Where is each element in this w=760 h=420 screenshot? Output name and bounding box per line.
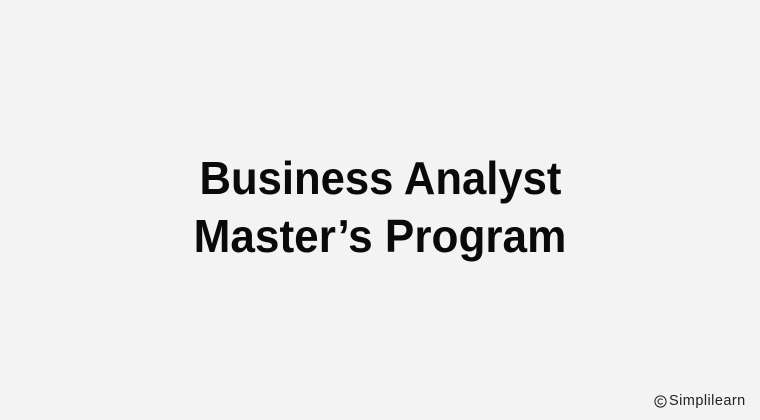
title xyxy=(194,152,566,262)
logo: Simplilearn copyright mark: Simplilearn xyxy=(669,393,746,409)
title: Business Analyst xyxy=(200,152,561,204)
title: Master’s Program xyxy=(194,210,566,262)
